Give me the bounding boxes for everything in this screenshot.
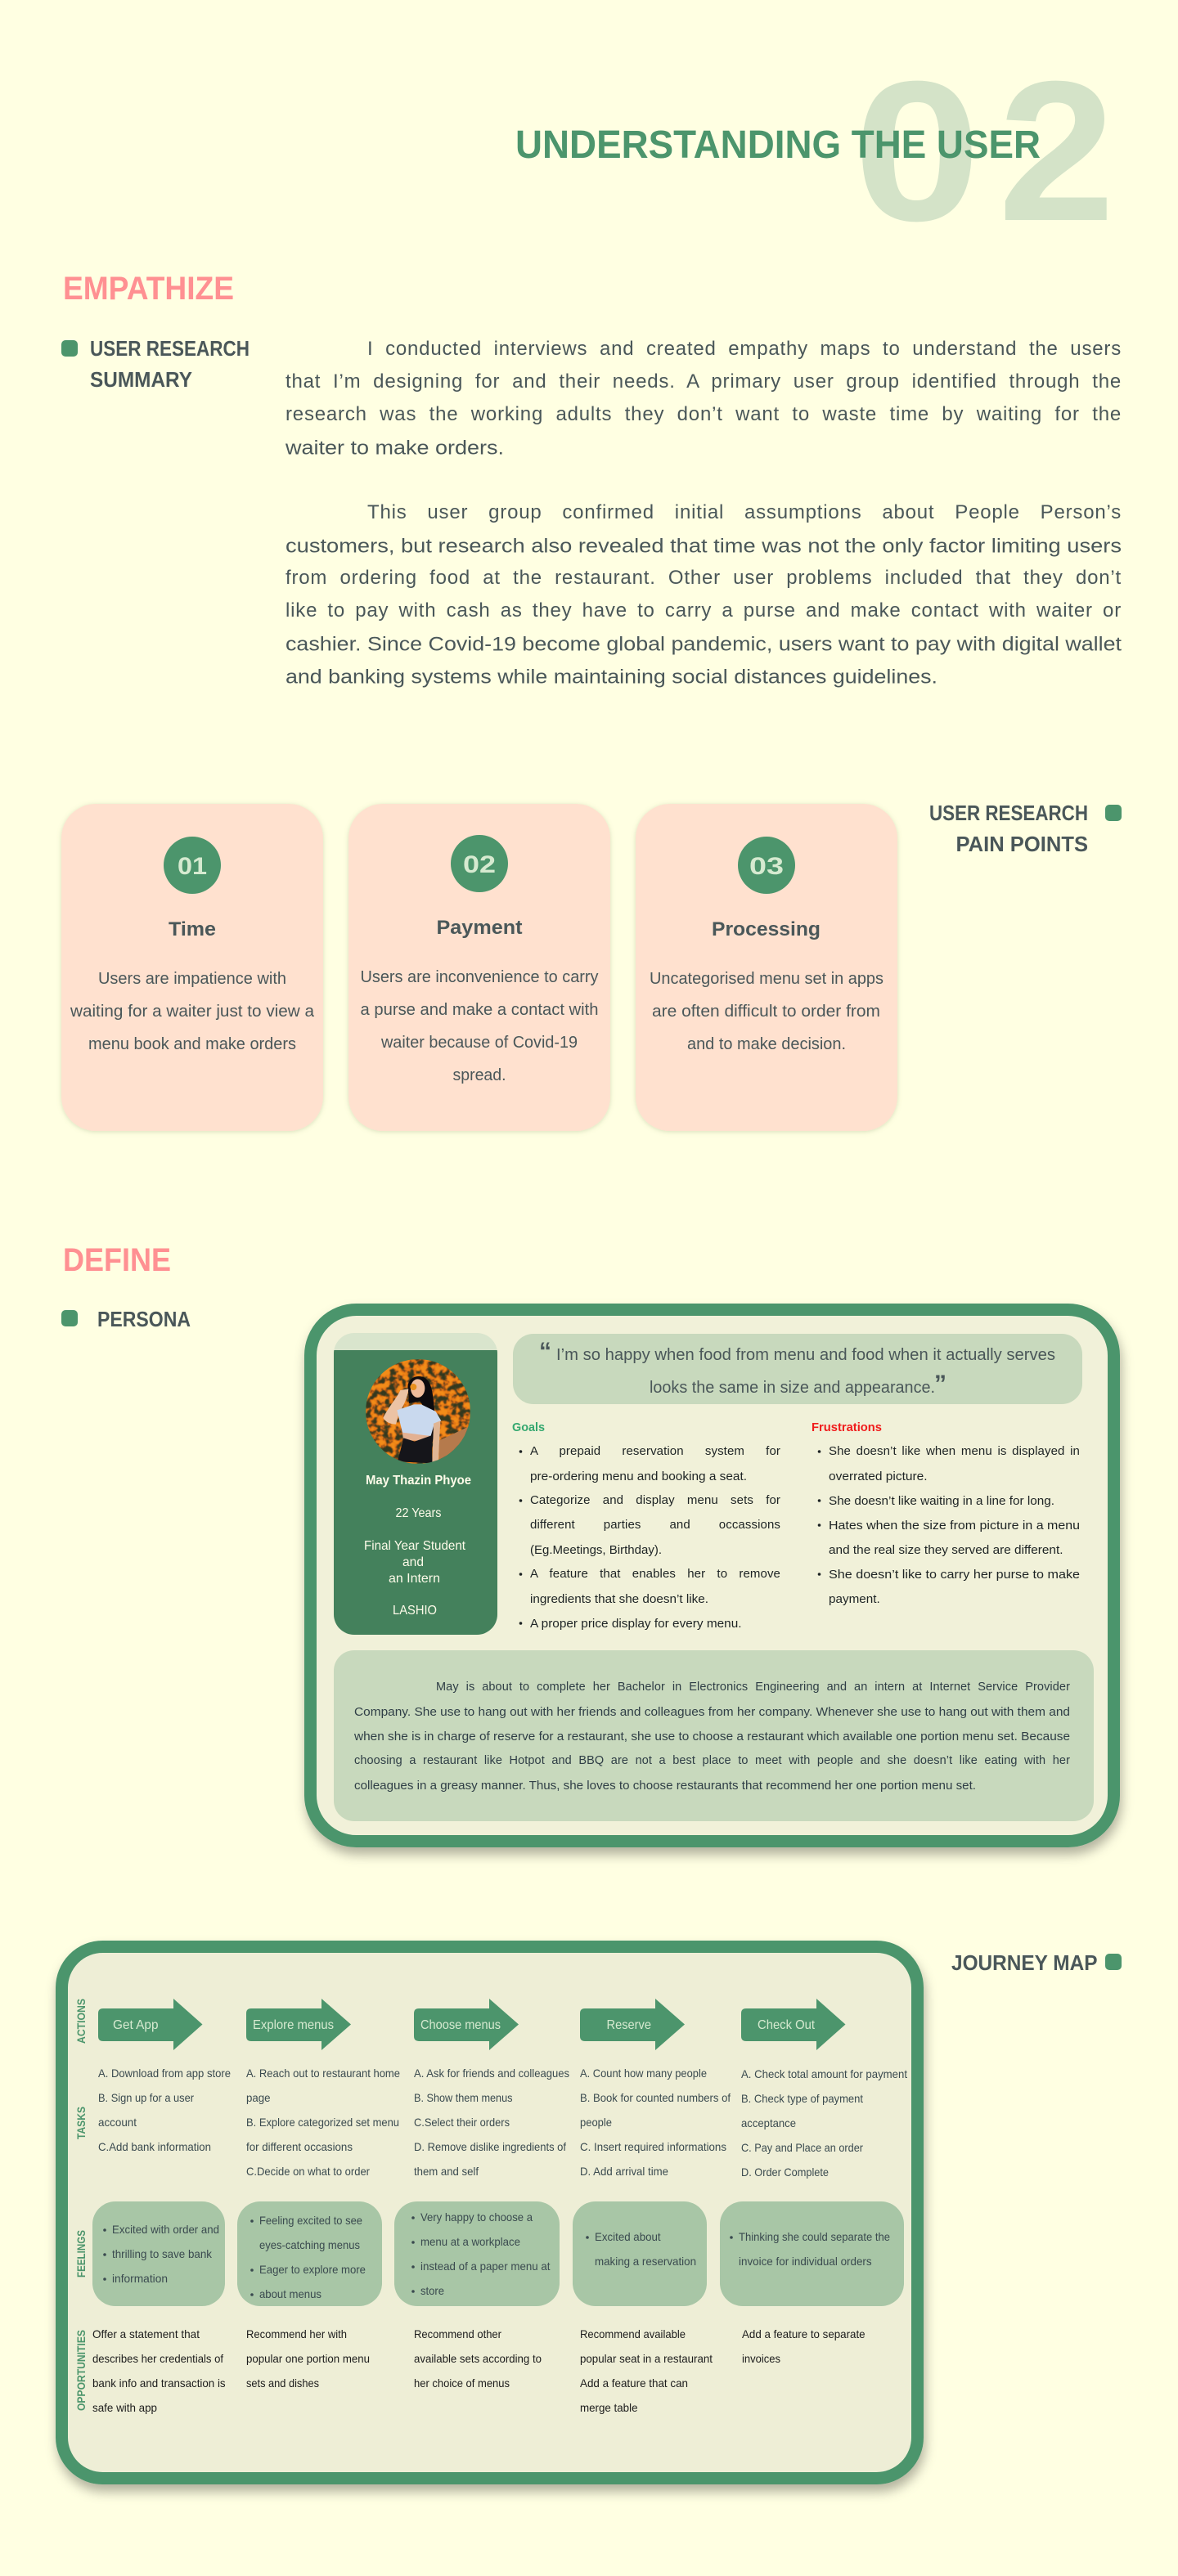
feelings: check out: invoice for individual orders [739,2255,872,2268]
tasks: explore menus: C.Decide on what to order [246,2165,370,2178]
goals list: A prepaid reservation system for [530,1444,780,1458]
frustrations list: She doesn’t like when menu is displayed in [829,1444,1080,1458]
text block: research summary paragraph 2 [286,496,1122,689]
tasks: check out: D. Order Complete [741,2165,829,2179]
tasks: explore menus: for different occasions [246,2140,353,2153]
feelings: get app: thrilling to save bank [112,2247,213,2260]
label: user research pain points [929,801,1122,856]
panel: pain point 03 processing [636,804,897,1131]
tasks: explore menus [246,2067,400,2178]
tasks: get app: account [98,2116,137,2129]
tasks: check out: A. Check total amount for payment [741,2067,907,2080]
feelings: choose menus: store [420,2284,444,2297]
large section number: 0 [853,39,981,263]
opportunities: check out: Add a feature to separate [742,2327,866,2340]
persona biography: colleagues in a greasy manner. Thus, she loves to choose restaurants that recommend her one portion menu set. [354,1779,976,1793]
arrow: choose menus: Choose menus [420,2018,501,2032]
card text: payment [360,968,599,1084]
label: user research summary: USER RESEARCH [90,336,250,361]
card heading: payment: Payment [437,917,523,939]
persona details: an Intern [389,1572,440,1586]
feelings: check out [720,2201,904,2306]
tasks: reserve: B. Book for counted numbers of [580,2091,731,2104]
text block: research summary paragraph 1 [285,333,1122,460]
goals list [512,1420,780,1631]
goals list: ingredients that she doesn’t like. [530,1592,708,1606]
icon: number badge 03: 03 [749,853,784,880]
persona details: Final Year Student [364,1539,466,1553]
tasks: choose menus: C.Select their orders [414,2116,510,2129]
text block: research summary paragraph 1: waiter to make orders. [285,437,504,460]
callout: persona quote [513,1334,1082,1404]
icon: number badge 03 [738,837,795,894]
feelings: choose menus: Very happy to choose a [420,2210,533,2224]
tasks: get app: C.Add bank information [98,2140,211,2153]
label: user research summary [61,336,250,392]
feelings: explore menus: eyes-catching menus [259,2238,360,2251]
card text: processing: Uncategorised menu set in apps [650,970,884,988]
arrow: get app [98,1999,203,2050]
tasks: explore menus: B. Explore categorized set menu [246,2116,399,2129]
arrow: get app: Get App [113,2018,159,2032]
persona details: 22 Years [396,1506,442,1520]
card text: payment: waiter because of Covid-19 [380,1034,578,1052]
label: journey map: JOURNEY MAP [951,1950,1098,1975]
card text: payment: a purse and make a contact with [360,1001,599,1019]
feelings: choose menus [394,2201,560,2306]
tasks: check out: B. Check type of payment [741,2092,863,2105]
heading: empathize: EMPATHIZE [63,271,234,307]
goals list: (Eg.Meetings, Birthday). [530,1543,662,1557]
panel: journey map [62,1946,918,2478]
arrow: choose menus [414,1999,519,2050]
persona details: and [402,1555,424,1569]
tasks: choose menus: them and self [414,2165,479,2178]
feelings: get app [92,2201,225,2306]
text block: research summary paragraph 1: I conducted interviews and created empathy maps to understand the users [367,338,1122,360]
persona details: May Thazin Phyoe [366,1474,471,1488]
tasks: get app [98,2067,231,2153]
persona photo [366,1359,472,1464]
text block: research summary paragraph 2: like to pay with cash as they have to carry a purse and make contact with waiter or [286,599,1122,622]
tasks: reserve: A. Count how many people [580,2067,707,2080]
tasks: explore menus: A. Reach out to restaurant home [246,2067,400,2080]
frustrations list: payment. [829,1592,880,1606]
callout: persona quote: looks the same in size and appearance. [650,1379,935,1397]
icon: number badge 02: 02 [463,851,496,878]
feelings: explore menus: Feeling excited to see [259,2214,362,2227]
opportunities: explore menus: Recommend her with [246,2327,347,2340]
tasks: check out: C. Pay and Place an order [741,2141,863,2154]
opportunities: reserve: popular seat in a restaurant [580,2352,713,2365]
goals heading: Goals [512,1420,545,1434]
row label: feelings: FEELINGS [74,2230,88,2278]
feelings: reserve [573,2201,707,2306]
text block: research summary paragraph 2: from ordering food at the restaurant. Other user problems included that they don’t [286,567,1122,589]
opportunities: choose menus: Recommend other [414,2327,501,2340]
arrow: explore menus [246,1999,351,2050]
large section number [853,39,1115,263]
feelings: check out: Thinking she could separate the [739,2230,890,2243]
text block: research summary paragraph 2: and banking systems while maintaining social distances guidelines. [286,666,937,689]
persona biography: May is about to complete her Bachelor in Electronics Engineering and an intern at Internet Service Provider [436,1681,1070,1694]
frustrations list: and the real size they served are different. [829,1543,1063,1557]
card text: time: menu book and make orders [88,1035,296,1053]
card text: payment: spread. [453,1066,506,1084]
persona biography: Company. She use to hang out with her friends and colleagues from her company. Whenever she use to hang out with them and [354,1706,1070,1719]
tasks: choose menus [414,2067,569,2178]
label: user research pain points: USER RESEARCH [929,801,1088,825]
label: persona [61,1307,191,1331]
arrow: check out [741,1999,846,2050]
feelings: explore menus: about menus [259,2287,321,2300]
heading: define: DEFINE [63,1242,171,1278]
feelings: explore menus [237,2201,382,2306]
opportunities: explore menus [246,2327,370,2390]
tasks: get app: A. Download from app store [98,2067,231,2080]
persona biography: choosing a restaurant like Hotpot and BBQ are not a best place to meet with people and she doesn’t like eating with her [354,1754,1070,1767]
row label: tasks: TASKS [74,2107,88,2139]
opportunities: get app: describes her credentials of [92,2352,223,2365]
frustrations heading: Frustrations [812,1420,882,1434]
opportunities: explore menus: popular one portion menu [246,2352,370,2365]
card heading: time: Time [169,918,216,940]
opportunities: check out: invoices [742,2352,780,2365]
tasks: choose menus: D. Remove dislike ingredients of [414,2140,566,2153]
feelings: choose menus: instead of a paper menu at [420,2260,551,2273]
tasks: reserve: D. Add arrival time [580,2165,668,2178]
arrow: reserve: Reserve [607,2018,651,2032]
opportunities: check out [742,2327,866,2365]
goals list: different parties and occassions [530,1518,780,1532]
opportunities: reserve [580,2327,713,2414]
arrow: explore menus: Explore menus [253,2018,334,2032]
opportunities: choose menus [414,2327,542,2390]
text block: research summary paragraph 1: that I’m designing for and their needs. A primary user group identified through the [286,370,1122,393]
tasks: reserve: people [580,2116,612,2129]
icon: number badge 02 [451,835,508,892]
opportunities: get app: Offer a statement that [92,2327,200,2340]
tasks: get app: B. Sign up for a user [98,2091,194,2104]
label: user research pain points: PAIN POINTS [955,832,1088,856]
text block: research summary paragraph 1: research was the working adults they don’t want to waste time by waiting for the [286,403,1122,425]
frustrations list [812,1420,1080,1606]
feelings: reserve: Excited about [595,2230,661,2243]
goals list: pre-ordering menu and booking a seat. [530,1470,747,1483]
persona profile card [334,1333,497,1635]
opportunities: choose menus: available sets according to [414,2352,542,2365]
feelings: explore menus: Eager to explore more [259,2263,366,2276]
text block: research summary paragraph 2: This user group confirmed initial assumptions about People Person’s [367,501,1122,523]
opportunities: get app [92,2327,226,2414]
label: persona: PERSONA [97,1307,191,1331]
icon: number badge 01 [164,837,221,894]
goals list: Categorize and display menu sets for [530,1493,780,1507]
opportunities: explore menus: sets and dishes [246,2376,319,2390]
frustrations list: She doesn’t like to carry her purse to make [829,1568,1080,1582]
tasks: check out: acceptance [741,2116,796,2129]
card text: time: waiting for a waiter just to view a [70,1003,315,1021]
goals list: A feature that enables her to remove [530,1567,780,1581]
row label: actions: ACTIONS [74,1999,88,2044]
opportunities: get app: bank info and transaction is [92,2376,226,2390]
card text: time: Users are impatience with [98,970,286,988]
arrow: reserve [580,1999,685,2050]
persona details [364,1474,471,1618]
opportunities: reserve: Add a feature that can [580,2376,688,2390]
opportunities: reserve: Recommend available [580,2327,686,2340]
large section number: 2 [998,39,1115,263]
arrow: check out: Check Out [758,2018,816,2032]
tasks: reserve [580,2067,731,2178]
callout: persona quote: “ [539,1338,551,1365]
card text: processing [650,970,884,1053]
tasks: reserve: C. Insert required informations [580,2140,726,2153]
goals list: A proper price display for every menu. [530,1617,741,1631]
opportunities: get app: safe with app [92,2401,157,2414]
card text: payment: Users are inconvenience to carry [360,968,599,986]
frustrations list: Hates when the size from picture in a menu [829,1519,1080,1533]
feelings: reserve: making a reservation [595,2255,696,2268]
opportunities: reserve: merge table [580,2401,638,2414]
label: user research summary: SUMMARY [90,367,192,392]
tasks: explore menus: page [246,2091,271,2104]
text block: research summary paragraph 2: customers, but research also revealed that time was not the only factor limiting users [286,535,1122,558]
callout: persona quote: I’m so happy when food from menu and food when it actually serves [556,1346,1055,1364]
frustrations list: overrated picture. [829,1470,928,1483]
persona biography: when she is in charge of reserve for a restaurant, she use to choose a restaurant which available one portion menu set. Because [353,1730,1070,1744]
panel: persona [311,1310,1114,1842]
card text: time [70,970,315,1053]
persona biography [334,1650,1094,1821]
title: UNDERSTANDING THE USER [515,123,1041,167]
opportunities: choose menus: her choice of menus [414,2376,510,2390]
feelings: get app: Excited with order and [112,2223,219,2236]
text block: research summary paragraph 2: cashier. Since Covid-19 become global pandemic, users want to pay with digital wallet [286,633,1122,656]
tasks: choose menus: A. Ask for friends and colleagues [414,2067,569,2080]
card text: processing: are often difficult to order from [652,1003,880,1021]
persona details: LASHIO [393,1604,437,1618]
tasks: choose menus: B. Show them menus [414,2091,512,2104]
tasks: check out [741,2067,907,2179]
feelings: choose menus: menu at a workplace [420,2235,520,2248]
row label: opportunities: OPPORTUNITIES [74,2330,88,2411]
icon: number badge 01: 01 [178,853,207,880]
card text: processing: and to make decision. [687,1035,846,1053]
card heading: processing: Processing [712,918,821,940]
panel: pain point 01 time [61,804,323,1131]
callout: persona quote: ” [934,1371,946,1398]
frustrations list: She doesn’t like waiting in a line for long. [829,1494,1054,1508]
feelings: get app: information [112,2272,168,2285]
panel: pain point 02 payment [348,804,610,1131]
